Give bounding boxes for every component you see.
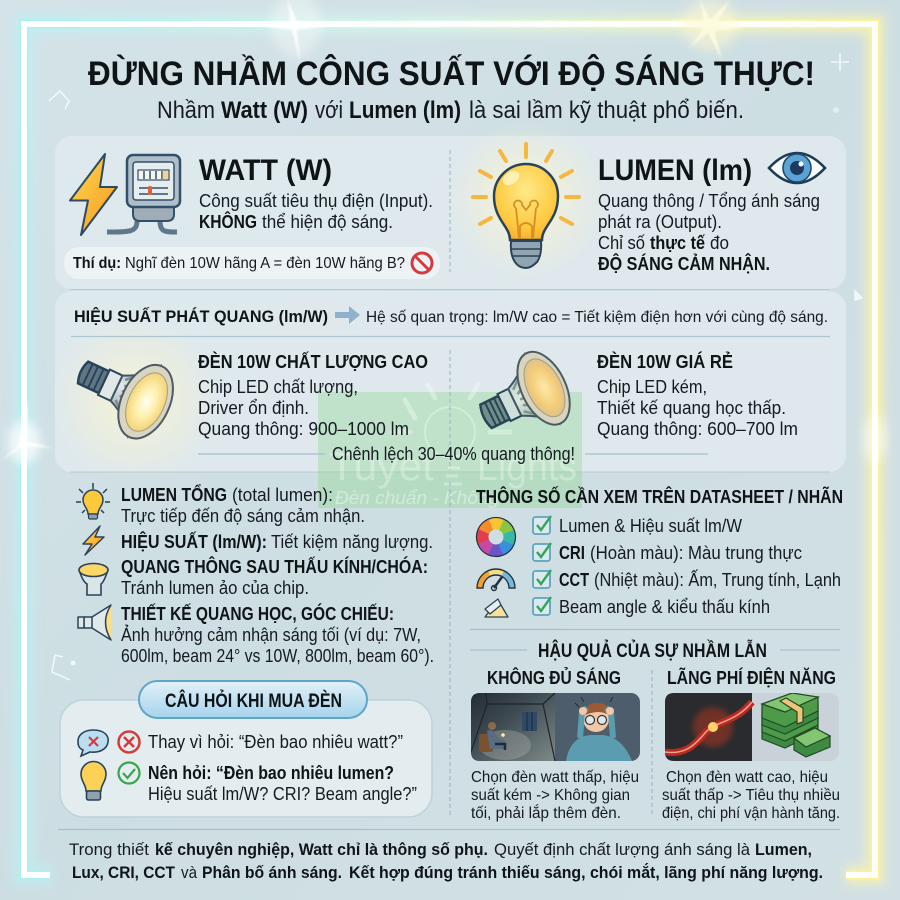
text: cheap lamp: ĐÈN 10W GIÁ RẺ <box>597 351 733 372</box>
watermark: Tuyet <box>329 445 434 489</box>
icon: small bulb <box>76 483 110 519</box>
icon: cheap lamp <box>467 344 580 452</box>
text: total lumen: LUMEN TỔNG <box>121 484 227 505</box>
text: wasted energy <box>662 769 840 822</box>
text: not enough light: tối, phải lắp thêm đèn. <box>471 803 621 822</box>
heading: pill: CÂU HỎI KHI MUA ĐÈN <box>165 690 342 712</box>
text: cct check: CCT <box>559 570 589 590</box>
callout: example: Nghĩ đèn 10W hãng A = đèn 10W hãng B? <box>125 255 405 272</box>
text: lumen description: ĐỘ SÁNG CẢM NHẬN. <box>598 253 770 274</box>
text: efficacy note: Hệ số quan trọng: lm/W cao = Tiết kiệm điện hơn với cùng độ sáng. <box>366 309 828 326</box>
text: total lumen: Trực tiếp đến độ sáng cảm nhận. <box>121 506 365 526</box>
footer conclusion: Lux, CRI, CCT <box>72 863 176 882</box>
text: lumen description: thực tế <box>650 233 706 253</box>
text: flux after lens <box>121 556 428 598</box>
text: high quality lamp <box>198 351 428 439</box>
heading: wasted energy: LÃNG PHÍ ĐIỆN NĂNG <box>667 667 836 688</box>
text: lumen description: phát ra (Output). <box>598 212 722 232</box>
watermark: Đèn chuẩn - Không <box>335 488 499 508</box>
icon: colour wheel <box>471 512 521 562</box>
icon: small bolt <box>83 526 104 555</box>
icon: light bulb <box>473 144 579 268</box>
icon: lightning bolt <box>70 154 117 235</box>
callout: example <box>64 247 440 279</box>
watermark: Lights <box>477 445 577 489</box>
subtitle: là sai lầm kỹ thuật phổ biến. <box>469 97 744 124</box>
checkbox: beam <box>533 597 551 615</box>
heading: watt: WATT (W) <box>199 154 332 187</box>
text: wasted energy: Chọn đèn watt cao, hiệu <box>666 769 828 786</box>
panel: luminous efficacy content <box>64 306 828 470</box>
callout: example: Thí dụ: <box>73 255 121 272</box>
subtitle: Watt (W) <box>221 97 308 124</box>
heading: datasheet: THÔNG SỐ CẦN XEM TRÊN DATASHEET / NHÃN <box>476 486 843 507</box>
text: beam check: Beam angle & kiểu thấu kính <box>559 597 770 617</box>
checkbox: cri <box>533 543 551 561</box>
text: optical design: 600lm, beam 24° vs 10W, 800lm, beam 60°). <box>121 646 434 666</box>
panel: datasheet checklist <box>471 486 843 617</box>
icon: eye <box>769 153 825 183</box>
heading: lumen: LUMEN (lm) <box>598 154 752 187</box>
text: watt description: Công suất tiêu thụ điện (Input). <box>199 191 433 211</box>
text: lumen description: Quang thông / Tổng ánh sáng <box>598 191 820 211</box>
text: not enough light: Chọn đèn watt thấp, hiệu <box>471 769 639 786</box>
text: watt description <box>199 191 433 232</box>
watermark <box>318 385 582 508</box>
footer conclusion: Kết hợp đúng tránh thiếu sáng, chói mắt, lãng phí năng lượng. <box>349 863 823 882</box>
text: high quality lamp: Quang thông: 900–1000 lm <box>198 419 409 439</box>
callout: difference: Chênh lệch 30–40% quang thông! <box>332 444 575 464</box>
checkbox: cct <box>533 570 551 588</box>
icon: speech bubble with cross <box>78 730 108 756</box>
icon: beam angle <box>485 599 508 617</box>
divider: central column <box>449 482 451 815</box>
text: high quality lamp: ĐÈN 10W CHẤT LƯỢNG CAO <box>198 351 428 372</box>
text: total lumen <box>121 484 365 526</box>
panel: what matters list <box>76 483 434 666</box>
footer conclusion: Quyết định chất lượng ánh sáng là <box>494 840 751 859</box>
panel: questions when buying <box>60 681 432 817</box>
text: cheap lamp <box>597 351 798 439</box>
text: cheap lamp: Thiết kế quang học thấp. <box>597 398 786 418</box>
text: right question: Hiệu suất lm/W? CRI? Beam angle?” <box>148 784 417 804</box>
image: burning wire and money <box>665 693 839 761</box>
heading: consequences: HẬU QUẢ CỦA SỰ NHẦM LẪN <box>538 640 767 662</box>
heading: efficacy: HIỆU SUẤT PHÁT QUANG (lm/W) <box>74 307 328 326</box>
text: not enough light: suất kém -> Không gian <box>471 787 630 804</box>
text: cri check: CRI <box>559 543 585 563</box>
text: wrong question: Thay vì hỏi: “Đèn bao nhiêu watt?” <box>148 732 403 752</box>
icon: electric meter <box>107 155 180 232</box>
text: not enough light <box>471 769 639 822</box>
checkbox: lumen <box>533 516 551 534</box>
text: lumen description <box>598 191 820 274</box>
text: flux after lens: QUANG THÔNG SAU THẤU KÍNH/CHÓA: <box>121 556 428 577</box>
text: watt description: thể hiện độ sáng. <box>262 212 393 232</box>
text: cheap lamp: Quang thông: 600–700 lm <box>597 419 798 439</box>
subtitle <box>157 97 744 124</box>
text: efficacy <box>121 531 433 552</box>
text: optical design <box>121 603 434 666</box>
text: efficacy: Tiết kiệm năng lượng. <box>271 532 433 552</box>
text: lumen description: đo <box>710 233 729 253</box>
icon: green check circle <box>118 762 140 784</box>
panel: consequences <box>470 630 840 822</box>
text: flux after lens: Tránh lumen ảo của chip. <box>121 578 309 598</box>
text: total lumen: (total lumen): <box>232 485 333 505</box>
footer conclusion <box>58 830 840 882</box>
footer conclusion: và <box>181 863 197 882</box>
text: high quality lamp: Driver ổn định. <box>198 398 309 418</box>
text: wasted energy: điện, chi phí vận hành tăng. <box>662 805 840 822</box>
arrow <box>335 306 360 324</box>
image: dark room and worried person <box>471 693 640 761</box>
text: cct check: (Nhiệt màu): Ấm, Trung tính, Lạnh <box>594 569 841 590</box>
text: right question <box>148 763 417 804</box>
subtitle: Nhầm <box>157 97 215 124</box>
text: optical design: THIẾT KẾ QUANG HỌC, GÓC CHIẾU: <box>121 603 394 624</box>
heading: pill <box>139 681 367 718</box>
panel: luminous efficacy background <box>50 291 846 485</box>
sparkle decorations <box>49 53 862 680</box>
light bursts <box>0 0 887 464</box>
text: watt description: KHÔNG <box>199 211 257 232</box>
subtitle: với <box>315 97 343 124</box>
footer conclusion: Phân bố ánh sáng. <box>202 863 342 882</box>
icon: bulb <box>81 762 106 800</box>
icon: red cross circle <box>118 732 140 752</box>
icon: high quality lamp <box>64 336 184 447</box>
panel: watt and lumen <box>55 120 846 290</box>
footer conclusion: kế chuyên nghiệp, Watt chỉ là thông số phụ. <box>155 840 488 859</box>
icon: prohibited <box>412 253 432 273</box>
subtitle: Lumen (lm) <box>349 97 461 124</box>
text: cri check: (Hoàn màu): Màu trung thực <box>590 543 802 563</box>
text: cheap lamp: Chip LED kém, <box>597 377 707 397</box>
icon: colour temperature gauge <box>477 569 515 590</box>
text: lumen description: Chỉ số <box>598 233 645 253</box>
heading: not enough light: KHÔNG ĐỦ SÁNG <box>487 667 621 688</box>
footer conclusion: Trong thiết <box>69 840 149 859</box>
text: efficacy: HIỆU SUẤT (lm/W): <box>121 531 267 552</box>
text: wasted energy: suất thấp -> Tiêu thụ nhiều <box>662 787 840 804</box>
text: lumen check: Lumen & Hiệu suất lm/W <box>559 516 742 536</box>
text: optical design: Ảnh hưởng cảm nhận sáng tối (ví dụ: 7W, <box>121 624 421 645</box>
text: high quality lamp: Chip LED chất lượng, <box>198 377 358 397</box>
text: right question: Nên hỏi: “Đèn bao nhiêu lumen? <box>148 763 394 783</box>
icon: beam cone <box>78 605 112 640</box>
title: ĐỪNG NHẦM CÔNG SUẤT VỚI ĐỘ SÁNG THỰC! <box>88 54 815 93</box>
icon: reflector <box>79 564 108 595</box>
footer conclusion: Lumen, <box>755 840 812 859</box>
